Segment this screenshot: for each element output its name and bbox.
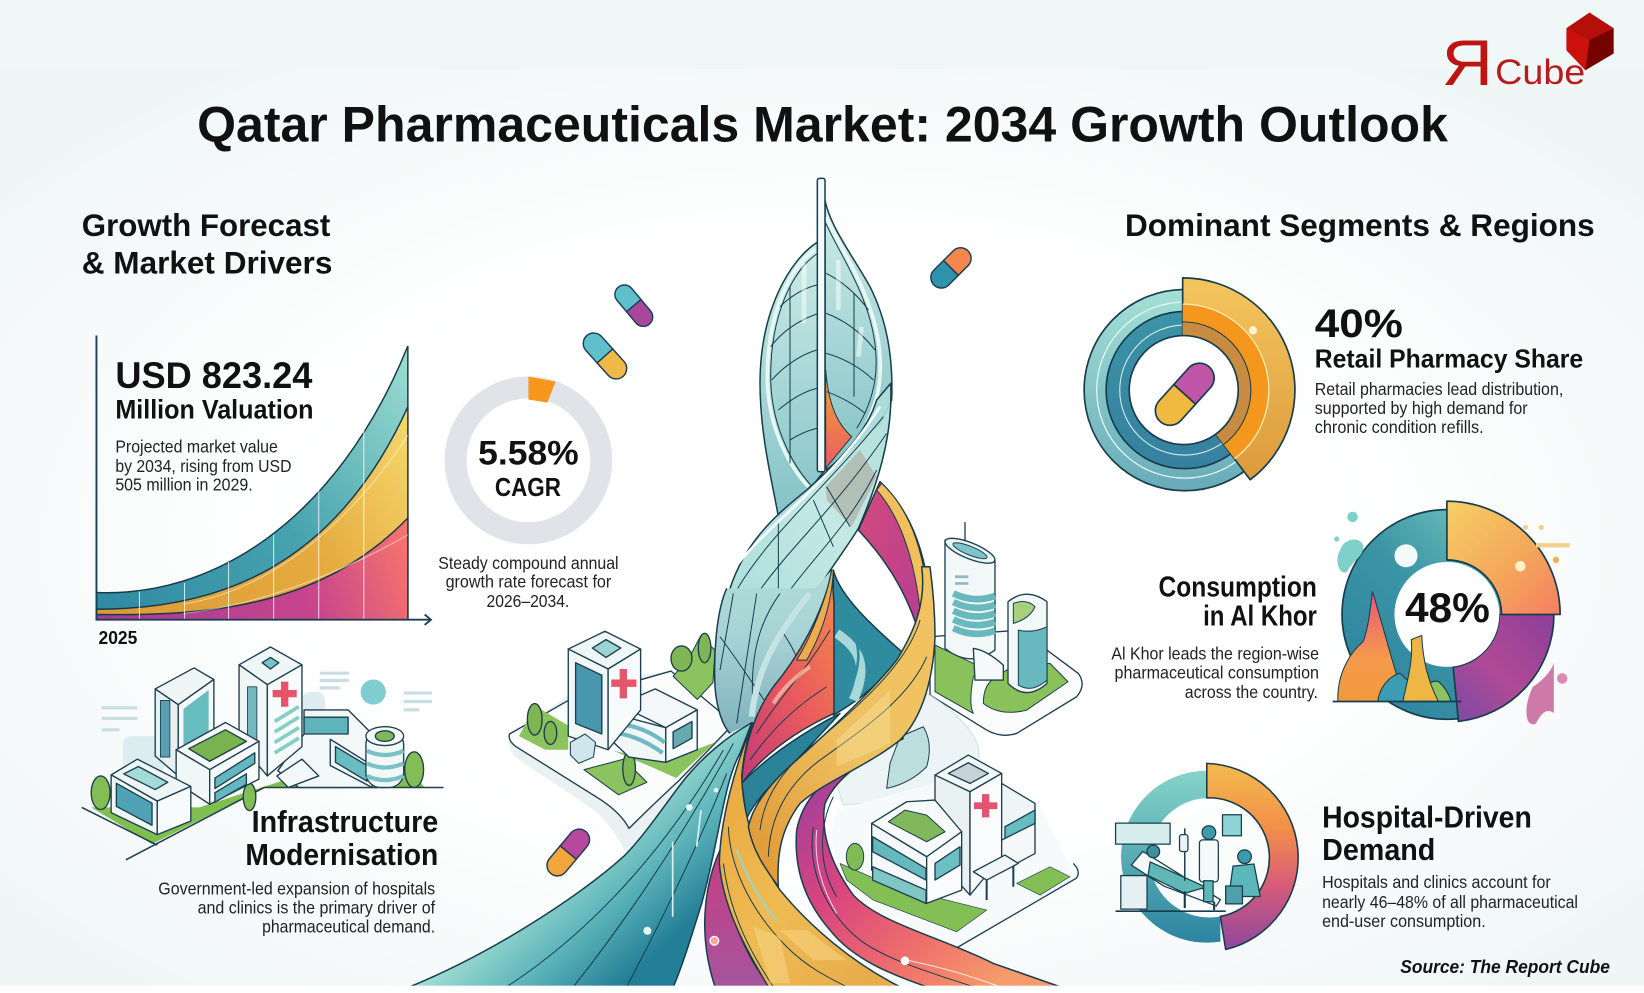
text: consumption in Al Khor: Consumption	[1159, 571, 1317, 603]
stat: 40% retail pharmacy share: 40%	[1315, 302, 1403, 346]
upper right island	[930, 522, 1082, 735]
heading: Infrastructure Modernisation: Infrastructure	[252, 805, 438, 839]
glass base	[715, 570, 832, 733]
text: hospital-driven demand: Hospital-Driven	[1322, 800, 1532, 834]
title: Qatar Pharmaceuticals Market: 2034 Growth Outlook	[197, 96, 1449, 153]
icon: capsule orange purple	[543, 825, 594, 880]
tall building right with cross	[239, 647, 302, 685]
heading: Growth Forecast & Market Drivers: Growth Forecast	[82, 208, 331, 243]
text: hospital-driven demand: Demand	[1322, 833, 1435, 867]
trees	[91, 752, 424, 833]
donut: retail pharmacy 40%	[1084, 278, 1295, 491]
gold upper ribbon	[748, 567, 935, 887]
infrastructure description: Government-led expansion of hospitals	[158, 878, 435, 898]
chart description: 505 million in 2029.	[115, 475, 253, 495]
donut: Al Khor 48%	[1333, 501, 1570, 724]
chart headline: USD 823.24 Million Valuation: USD 823.24	[115, 355, 313, 396]
text: consumption in Al Khor: across the country.	[1185, 682, 1318, 702]
logo: RCube	[1442, 13, 1614, 99]
stat: 40% retail pharmacy share: Retail pharmacies lead distribution,	[1315, 379, 1563, 399]
chart description: by 2034, rising from USD	[115, 456, 292, 476]
chart headline: USD 823.24 Million Valuation	[115, 355, 313, 424]
stat: 40% retail pharmacy share: chronic condition refills.	[1315, 417, 1484, 437]
CAGR description: growth rate forecast for	[446, 572, 611, 592]
green roof building	[176, 722, 259, 770]
text: consumption in Al Khor: pharmaceutical consumption	[1115, 662, 1319, 682]
heading: Infrastructure Modernisation: Modernisation	[245, 838, 438, 872]
coral ribbon	[742, 570, 834, 783]
donut: CAGR: CAGR	[495, 472, 561, 502]
icon: capsule teal yellow	[579, 329, 631, 383]
tall building left	[155, 668, 214, 705]
icon: capsule blue orange	[926, 243, 975, 292]
text: consumption in Al Khor	[1111, 571, 1319, 702]
central illustration: road, right islands and towers	[832, 522, 1082, 952]
infrastructure description: pharmaceutical demand.	[262, 917, 435, 937]
big teal ribbon	[410, 723, 752, 987]
annex	[278, 710, 377, 787]
chart axis label: 2025: 2025	[99, 627, 137, 648]
source note: Source: The Report Cube	[1400, 956, 1610, 977]
logo: RCube: Cube	[1495, 52, 1585, 92]
text: hospital-driven demand: Hospitals and clinics account for	[1322, 872, 1551, 892]
stat: 40% retail pharmacy share: Retail Pharmacy Share	[1315, 344, 1583, 374]
CAGR description: 2026–2034.	[486, 591, 569, 611]
central ribbons	[410, 567, 1060, 987]
heading: Growth Forecast & Market Drivers	[82, 208, 332, 281]
bottom edge strip	[0, 986, 1644, 993]
CAGR description: Steady compound annual	[438, 553, 619, 573]
text: hospital-driven demand: nearly 46–48% of all pharmaceutical	[1322, 892, 1578, 912]
central illustration: left island hospital	[508, 631, 734, 876]
stat: 40% retail pharmacy share	[1315, 302, 1583, 437]
donut: CAGR	[456, 376, 601, 533]
donut: hospital demand	[1116, 763, 1298, 949]
heading: Dominant Segments & Regions: Dominant Segments & Regions	[1125, 208, 1595, 243]
heading: Growth Forecast & Market Drivers: & Market Drivers	[82, 246, 332, 281]
gold big ribbon	[719, 723, 900, 987]
small front building	[111, 759, 191, 801]
stat: 40% retail pharmacy share: supported by high demand for	[1315, 398, 1528, 418]
text: consumption in Al Khor: in Al Khor	[1203, 599, 1317, 631]
stat: 48%: 48%	[1405, 584, 1490, 631]
logo: RCube: Я	[1442, 26, 1493, 99]
icon: capsule in donut	[1149, 357, 1220, 431]
infrastructure description	[158, 878, 435, 937]
chart headline: USD 823.24 Million Valuation: Million Valuation	[115, 393, 313, 424]
donut: CAGR: 5.58%	[478, 435, 579, 473]
heading: Infrastructure Modernisation	[245, 805, 438, 872]
dark teal ribbon	[833, 570, 902, 715]
CAGR description	[438, 553, 619, 611]
road	[837, 693, 979, 805]
chart description: Projected market value	[115, 436, 278, 456]
chart description	[115, 436, 292, 495]
magenta lower ribbon	[705, 850, 770, 987]
illustration: hospital bed scene	[1116, 815, 1260, 911]
illustration: infrastructure hospital campus	[82, 647, 444, 860]
central tower: glass twist upper	[727, 178, 933, 637]
text: hospital-driven demand	[1322, 800, 1578, 931]
decorative blobs	[1334, 512, 1570, 724]
text: hospital-driven demand: end-user consumption.	[1322, 911, 1486, 931]
infrastructure description: and clinics is the primary driver of	[198, 897, 435, 917]
area chart: market growth	[96, 336, 431, 625]
lower right island	[832, 755, 1078, 952]
pink ribbon right	[796, 738, 1060, 987]
icon: capsule teal purple	[611, 281, 657, 330]
spikes	[1338, 591, 1405, 701]
text: consumption in Al Khor: Al Khor leads the region-wise	[1111, 644, 1319, 664]
